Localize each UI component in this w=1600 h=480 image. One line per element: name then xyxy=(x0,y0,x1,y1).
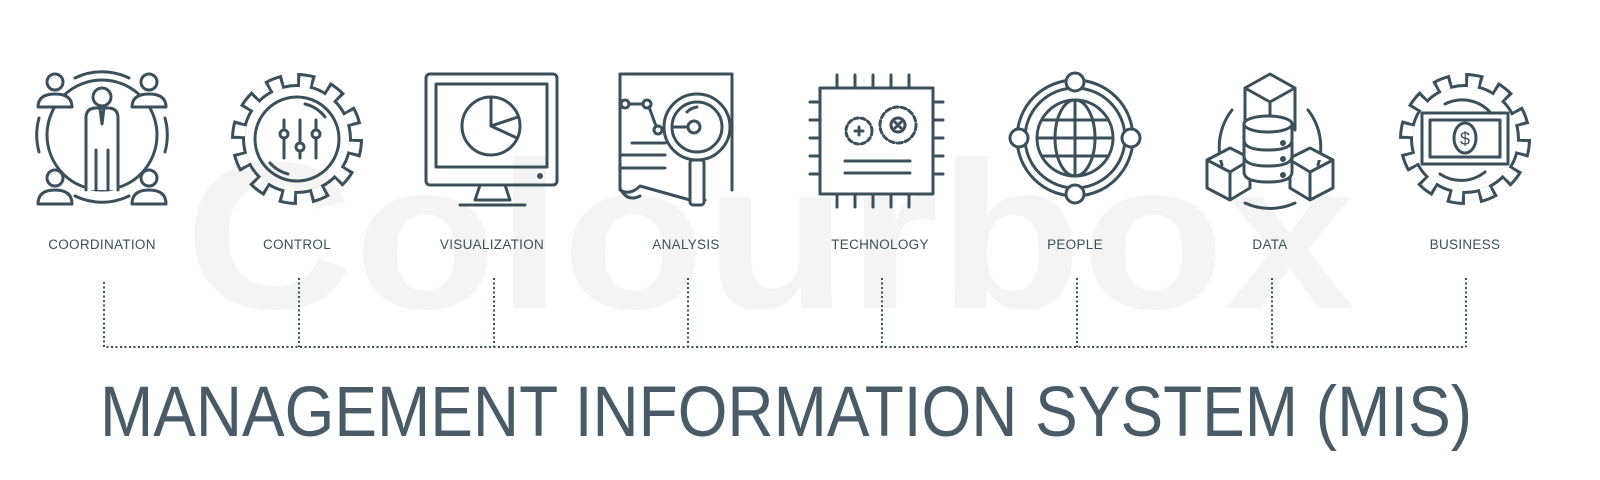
labels: COORDINATION xyxy=(48,237,156,252)
icon: analysis xyxy=(620,74,732,205)
labels: CONTROL xyxy=(263,237,331,252)
icon: technology chip xyxy=(810,75,943,207)
icon: people globe xyxy=(1010,73,1140,203)
icon: business gear: $ xyxy=(1460,129,1470,149)
labels: TECHNOLOGY xyxy=(831,237,929,252)
labels: VISUALIZATION xyxy=(440,237,544,252)
title: MANAGEMENT INFORMATION SYSTEM (MIS) xyxy=(100,373,1472,452)
icon: visualization monitor xyxy=(426,74,557,205)
icon: business gear xyxy=(1406,80,1524,198)
labels: ANALYSIS xyxy=(652,237,720,252)
icon: control gear xyxy=(238,80,356,198)
watermark: Colourbox xyxy=(185,118,1355,353)
labels xyxy=(48,237,1500,252)
icon: coordination xyxy=(37,72,167,204)
icon: data xyxy=(1207,74,1333,208)
labels: PEOPLE xyxy=(1047,237,1103,252)
connector lines xyxy=(104,278,1466,347)
labels: DATA xyxy=(1252,237,1288,252)
labels: BUSINESS xyxy=(1430,237,1500,252)
